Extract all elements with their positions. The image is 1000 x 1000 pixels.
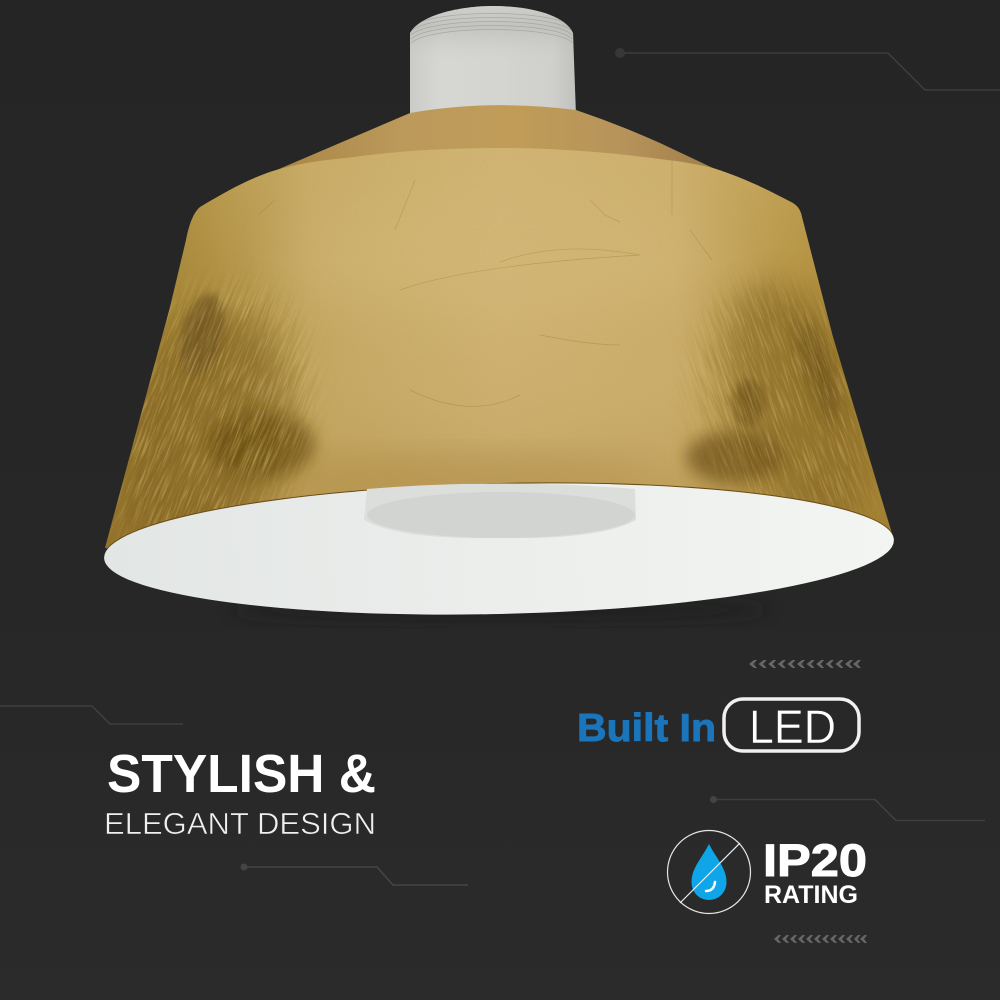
lamp gold band xyxy=(15,140,981,623)
lamp xyxy=(15,0,981,623)
rating text xyxy=(763,835,867,909)
rating text: IP20 xyxy=(763,835,867,886)
LED housing xyxy=(364,484,636,538)
badge: LED xyxy=(724,699,859,753)
lamp LED module xyxy=(364,484,636,538)
circuit line: lower right xyxy=(710,796,985,820)
lamp upper cone xyxy=(272,105,713,172)
subheading: elegant design: ELEGANT DESIGN xyxy=(104,806,376,841)
icon: no water drop xyxy=(668,830,750,914)
heading: built in: Built In xyxy=(577,707,716,750)
circuit line: lower left xyxy=(240,864,468,885)
heading: stylish: STYLISH & xyxy=(107,744,376,804)
chevron row: top xyxy=(749,660,861,668)
rating text: RATING xyxy=(764,881,858,909)
chevron row: bottom xyxy=(774,935,867,943)
badge: LED: LED xyxy=(749,700,836,753)
circuit line: top right xyxy=(615,48,1000,90)
lamp ceiling cap xyxy=(410,6,576,113)
LED lens xyxy=(367,492,635,538)
lamp white interior xyxy=(103,475,895,623)
circuit line: left xyxy=(0,706,183,724)
lamp shadow xyxy=(230,600,770,620)
